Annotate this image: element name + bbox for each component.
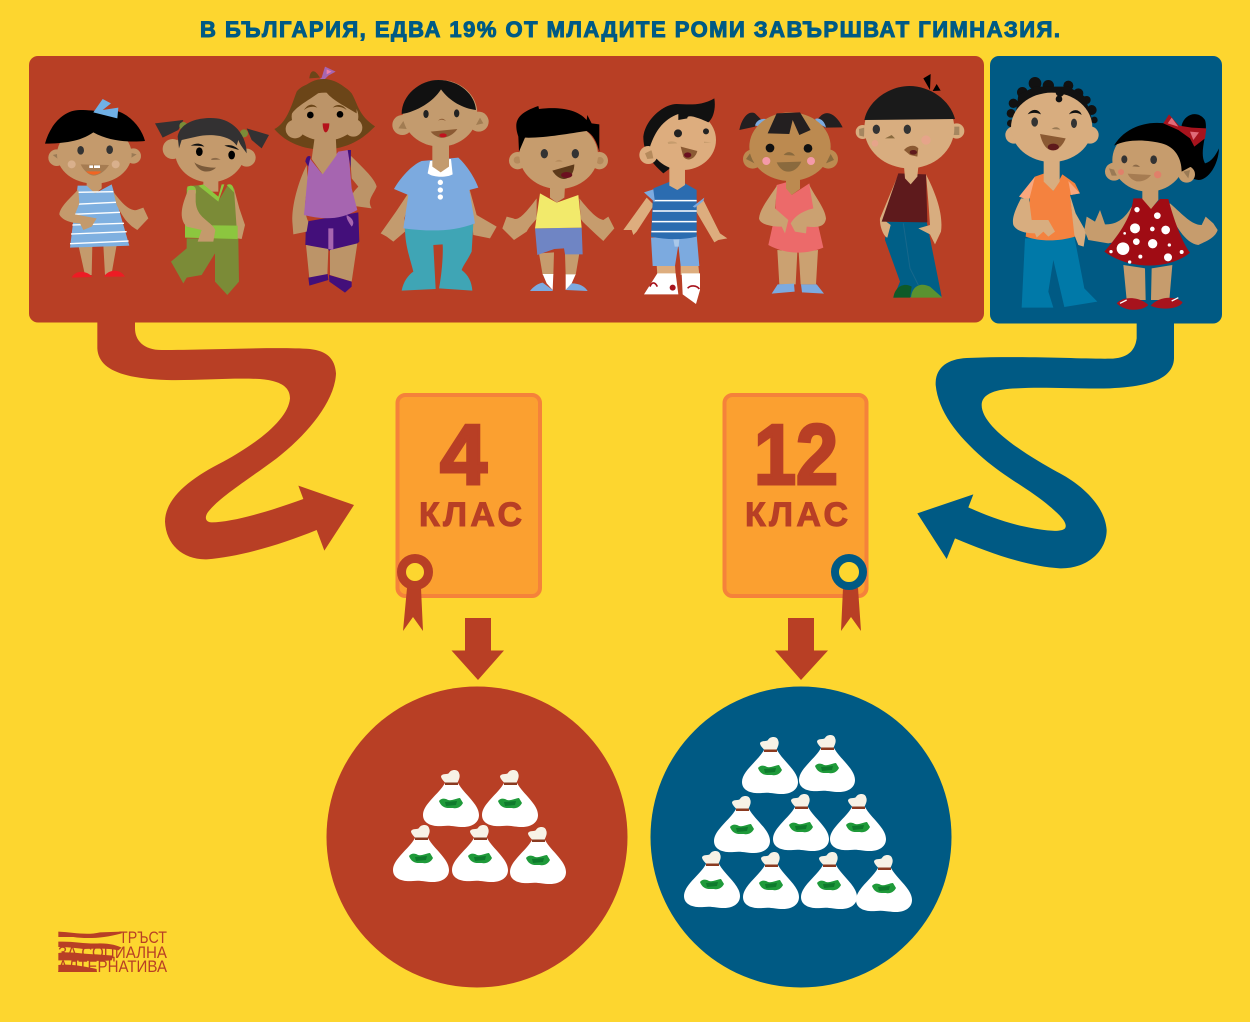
child 10: girl in red polka dot dress bbox=[1084, 114, 1219, 310]
grade card: 12th grade: КЛАС bbox=[745, 496, 848, 534]
logo: ЗА СОЦИАЛНА bbox=[58, 943, 168, 962]
child 1: girl in striped blue dress bbox=[45, 99, 148, 278]
title: В БЪЛГАРИЯ, ЕДВА 19% ОТ МЛАДИТЕ РОМИ ЗАВЪРШВАТ ГИМНАЗИЯ. bbox=[200, 17, 1060, 42]
arrow: down to larger income bbox=[775, 618, 828, 680]
grade card: 4th grade: КЛАС bbox=[419, 496, 522, 534]
child 2: girl in olive overalls with pigtails bbox=[155, 118, 269, 295]
grade card: 12th grade: 12 bbox=[754, 408, 838, 503]
circle: five money bags bbox=[326, 686, 628, 988]
logo: АЛТЕРНАТИВА bbox=[58, 957, 168, 976]
icon: blue ribbon rosette bbox=[835, 558, 863, 631]
logo: ТРЪСТ bbox=[119, 928, 167, 947]
child 5: boy in yellow top and blue shorts bbox=[502, 106, 614, 291]
child 4: boy in blue shirt and teal trousers bbox=[381, 80, 497, 291]
child 8: boy in maroon top and blue jeans bbox=[856, 74, 964, 298]
logo bbox=[58, 928, 168, 976]
panel: red group of eight children bbox=[29, 56, 984, 322]
child 3: girl in purple top with bow bbox=[274, 67, 377, 293]
arrow: blue path to 12th grade bbox=[917, 322, 1174, 568]
arrow: red path to 4th grade bbox=[97, 315, 354, 559]
grade card: 12th grade bbox=[724, 395, 866, 596]
grade card: 4th grade bbox=[398, 395, 540, 596]
child 6: boy in striped shirt bbox=[623, 98, 727, 304]
child 7: girl in pink dress with pigtails bbox=[739, 112, 843, 294]
circle: twelve money bags bbox=[650, 686, 952, 988]
icon: red ribbon rosette bbox=[402, 558, 428, 631]
grade card: 4th grade: 4 bbox=[440, 408, 487, 503]
panel: blue group of two children bbox=[990, 56, 1222, 324]
arrow: down to small income bbox=[452, 618, 504, 680]
child 9: curly-haired boy in orange shirt bbox=[1005, 77, 1099, 308]
